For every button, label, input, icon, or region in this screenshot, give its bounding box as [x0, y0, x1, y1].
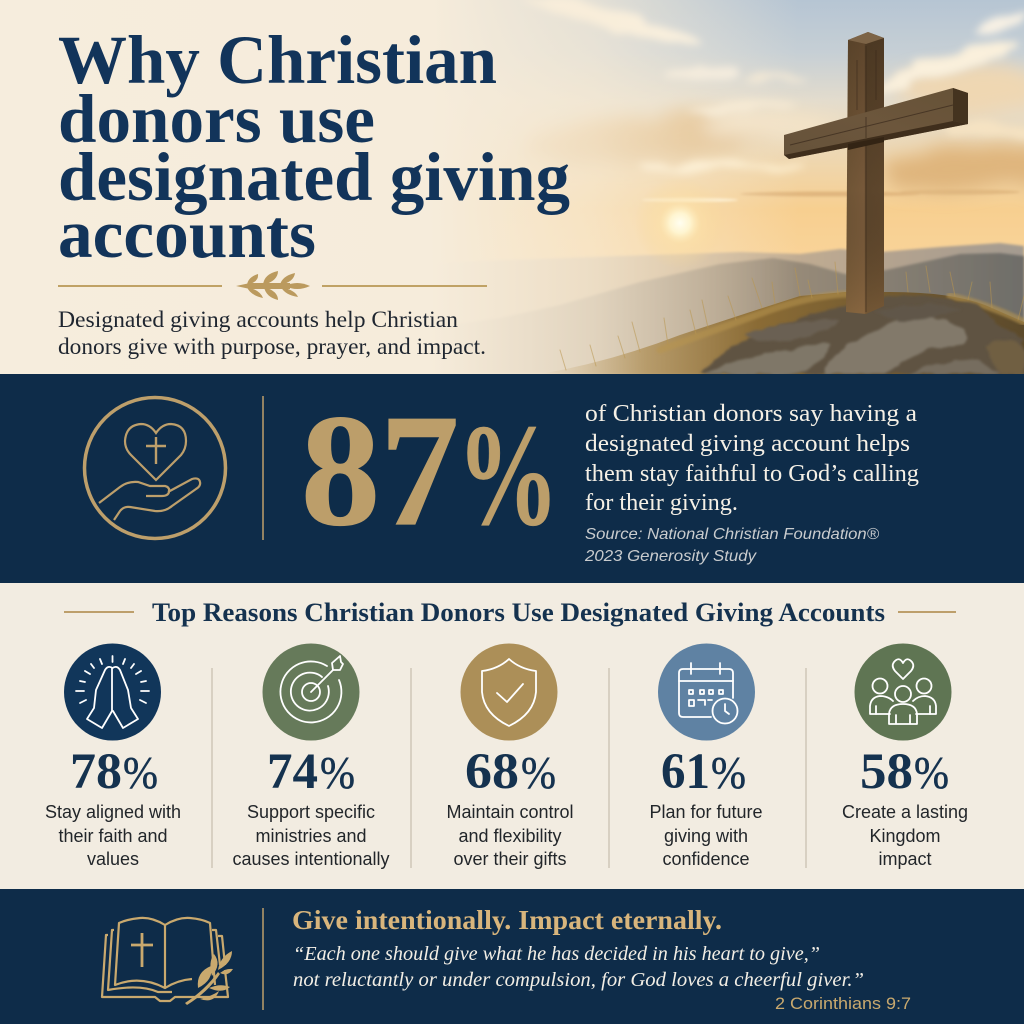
stat 58%: 58	[860, 744, 913, 800]
label: Support specific	[247, 802, 375, 822]
stat 74%	[267, 744, 355, 800]
statistic description: of Christian donors say having a	[585, 401, 917, 427]
stat 68%	[465, 744, 556, 800]
subtitle: donors give with purpose, prayer, and impact.	[58, 334, 486, 359]
label: confidence	[662, 849, 750, 869]
panel: closing verse band	[0, 889, 1024, 1024]
tagline: Give intentionally. Impact eternally.	[292, 905, 722, 935]
label: Maintain control	[446, 802, 574, 822]
label	[232, 802, 390, 869]
icon: praying hands	[64, 644, 161, 740]
stat 78%: 78	[70, 744, 122, 800]
title divider with laurel sprig	[58, 271, 487, 300]
icon: shield with check	[460, 644, 558, 740]
panel: top reasons	[0, 583, 1024, 889]
panel: 87% statistic band	[0, 374, 1024, 583]
stat 78%: %	[123, 747, 158, 798]
label: Plan for future	[649, 802, 763, 822]
icon: hand holding heart with cross	[84, 398, 226, 538]
subtitle	[58, 307, 486, 359]
statistic description	[585, 401, 919, 516]
label: Kingdom	[869, 826, 941, 846]
stat 68%: %	[521, 747, 556, 798]
big number 87%	[301, 381, 559, 559]
icon: target with arrow	[262, 644, 360, 740]
scripture quote: not reluctantly or under compulsion, for God loves a cheerful giver.”	[293, 969, 864, 991]
label: Create a lasting	[842, 802, 968, 822]
label: impact	[878, 849, 932, 869]
scripture reference: 2 Corinthians 9:7	[775, 994, 911, 1013]
source note	[584, 526, 879, 565]
stat 61%	[661, 744, 746, 800]
reason 2: ministries	[232, 644, 390, 869]
sun	[651, 196, 710, 240]
big number 87%: %	[457, 394, 559, 556]
stat 78%	[70, 744, 158, 800]
title: designated giving	[58, 139, 570, 215]
stat 74%: %	[320, 747, 355, 798]
label: giving with	[664, 826, 748, 846]
mountains	[496, 242, 1024, 374]
statistic description: designated giving account helps	[585, 431, 910, 457]
wooden cross	[784, 32, 968, 314]
reason 5: impact	[842, 644, 968, 869]
hero panel	[0, 0, 1024, 374]
source note: 2023 Generosity Study	[584, 548, 757, 565]
reason 3: control	[446, 644, 574, 869]
stat 74%: 74	[267, 744, 318, 800]
stat 61%: 61	[661, 744, 710, 800]
subtitle: Designated giving accounts help Christian	[58, 307, 458, 332]
scripture quote: “Each one should give what he has decided in his heart to give,”	[293, 943, 820, 965]
label: Stay aligned with	[45, 802, 181, 822]
title	[58, 35, 570, 258]
reason 4: planning	[649, 644, 763, 869]
stat 58%	[860, 744, 949, 800]
stat 61%: %	[711, 747, 746, 798]
left cream fade	[0, 0, 774, 374]
vertical divider	[262, 908, 264, 1010]
label	[842, 802, 968, 869]
label: their faith and	[58, 826, 168, 846]
label: values	[87, 849, 139, 869]
statistic description: for their giving.	[585, 490, 738, 516]
label	[446, 802, 574, 869]
scripture quote	[293, 943, 864, 991]
title: accounts	[58, 196, 316, 272]
label: and flexibility	[458, 826, 562, 846]
icon: calendar with clock	[658, 644, 755, 740]
label: causes intentionally	[232, 849, 390, 869]
label: ministries and	[255, 826, 367, 846]
label: over their gifts	[453, 849, 567, 869]
clouds	[519, 0, 1024, 202]
big number 87%: 87	[301, 381, 459, 559]
stat 68%: 68	[465, 744, 519, 800]
icon: open Bible with olive branch	[102, 918, 233, 1005]
title: Why Christian	[58, 22, 497, 98]
icon: people with heart	[854, 644, 952, 740]
section heading: Top Reasons Christian Donors Use Designated Giving Accounts	[152, 597, 885, 627]
reason 1: faith	[45, 644, 181, 869]
source note: Source: National Christian Foundation®	[585, 526, 879, 543]
title: donors use	[58, 81, 375, 157]
label	[649, 802, 763, 869]
hilltop with grass and rocks	[540, 262, 1024, 374]
label	[45, 802, 181, 869]
stat 58%: %	[914, 747, 949, 798]
vertical divider	[262, 396, 264, 540]
statistic description: them stay faithful to God’s calling	[585, 461, 919, 487]
